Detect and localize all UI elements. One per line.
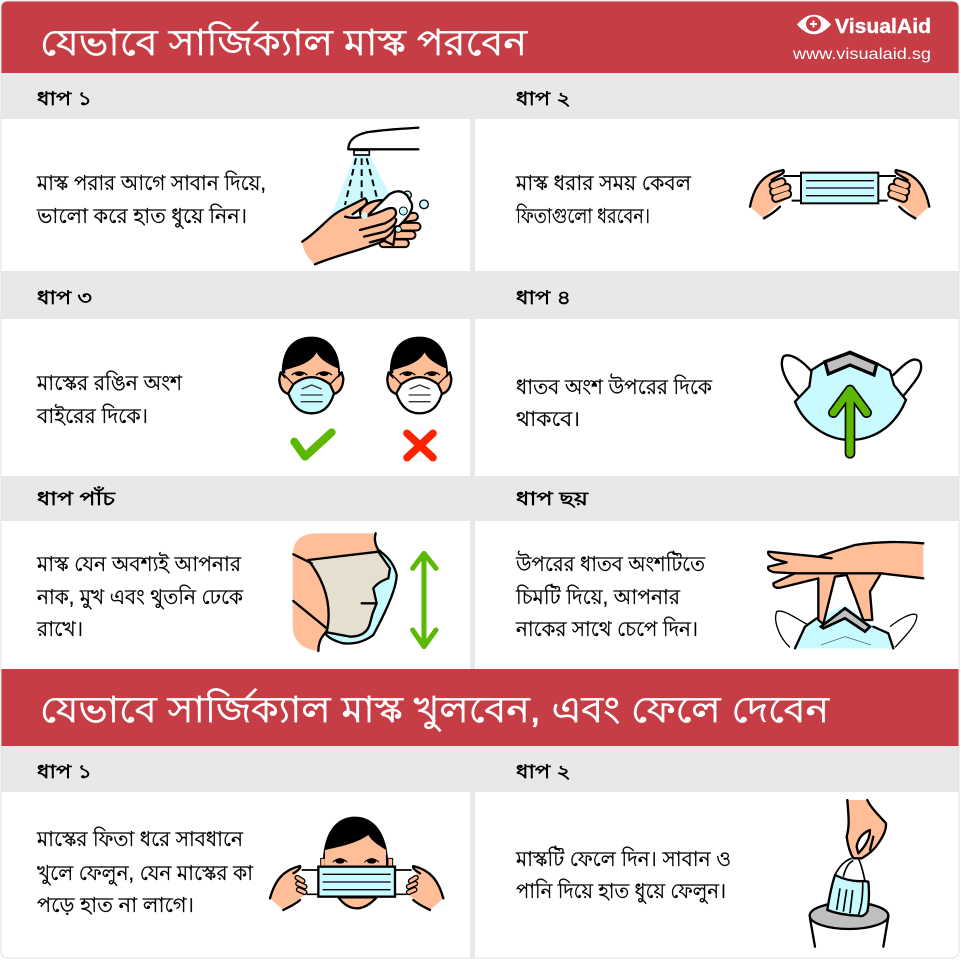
instruction text: মাস্কের রঙিন অংশ: [36, 371, 183, 395]
instruction text: পানি দিয়ে হাত ধুয়ে ফেলুন।: [516, 879, 726, 903]
icon: person removing mask by straps: [270, 817, 443, 910]
logo: VisualAid: [792, 15, 931, 63]
instruction text: উপরের ধাতব অংশটিতে: [515, 551, 706, 576]
step label: ধাপ ৪: [516, 288, 571, 309]
panel: removal banner: [0, 669, 961, 746]
instruction text: মাস্ক ধরার সময় কেবল: [515, 172, 691, 195]
step label: ধাপ ছয়: [516, 489, 589, 510]
instruction text: পড়ে হাত না লাগে।: [37, 894, 194, 917]
instruction text: [515, 846, 731, 903]
instruction text: নাক, মুখ এবং থুতনি ঢেকে: [36, 585, 243, 609]
instruction text: মাস্কটি ফেলে দিন। সাবান ও: [515, 846, 731, 871]
instruction text: রাখে।: [36, 618, 83, 641]
icon: fingers pinching metal strip on nose: [768, 542, 923, 648]
step label: ধাপ ১: [37, 762, 92, 783]
instruction text: [36, 171, 266, 228]
instruction text: ভালো করে হাত ধুয়ে নিন।: [36, 204, 247, 228]
panel: step 5: [0, 486, 470, 669]
icon: washing hands under tap: [302, 128, 428, 264]
instruction text: [515, 551, 706, 641]
icon: hands holding mask by straps: [750, 170, 929, 218]
icon: side profile with mask and double arrow: [293, 533, 436, 651]
step label: ধাপ ২: [516, 89, 571, 110]
instruction text: [36, 552, 243, 641]
panel: title banner: [0, 0, 961, 73]
instruction text: মাস্কের ফিতা ধরে সাবধানে: [36, 827, 243, 851]
instruction text: থাকবে।: [516, 408, 580, 431]
panel: step 1: [0, 89, 470, 271]
step label: ধাপ পাঁচ: [37, 486, 116, 510]
instruction text: মাস্ক পরার আগে সাবান দিয়ে,: [36, 171, 266, 195]
instruction text: [516, 374, 712, 431]
panel: step 6: [475, 489, 961, 669]
step label: ধাপ ৩: [37, 288, 92, 309]
logo: VisualAid: VisualAid: [835, 16, 931, 38]
instruction text: [36, 371, 183, 428]
icon: hand dropping mask into bin: [810, 800, 888, 947]
instruction text: [36, 827, 254, 917]
step label: ধাপ ২: [516, 762, 571, 783]
heading: যেভাবে সার্জিক্যাল মাস্ক খুলবেন, এবং ফেলে দেবেন: [40, 688, 830, 732]
panel: step 2: [475, 89, 961, 271]
instruction text: খুলে ফেলুন, যেন মাস্কের কা: [37, 862, 254, 885]
logo: VisualAid: www.visualaid.sg: [792, 46, 931, 63]
instruction text: ফিতাগুলো ধরবেন।: [515, 204, 650, 228]
instruction text: চিমটি দিয়ে, আপনার: [515, 584, 680, 609]
instruction text: মাস্ক যেন অবশ্যই আপনার: [36, 552, 241, 576]
panel: step 3: [0, 288, 470, 476]
panel: removal step 2: [475, 762, 961, 960]
instruction text: [515, 172, 691, 228]
instruction text: বাইরের দিকে।: [36, 404, 148, 428]
instruction text: ধাতব অংশ উপরের দিকে: [516, 374, 712, 399]
panel: removal step 1: [0, 762, 470, 960]
icon: face with white side of mask out: [387, 337, 451, 458]
step label: ধাপ ১: [37, 89, 92, 110]
panel: step 4: [475, 288, 961, 476]
title: যেভাবে সার্জিক্যাল মাস্ক পরবেন: [40, 21, 528, 63]
icon: mask with arrow pointing up to metal strip: [782, 352, 921, 453]
icon: face with blue side of mask out: [279, 337, 343, 457]
instruction text: নাকের সাথে চেপে দিন।: [515, 617, 698, 641]
